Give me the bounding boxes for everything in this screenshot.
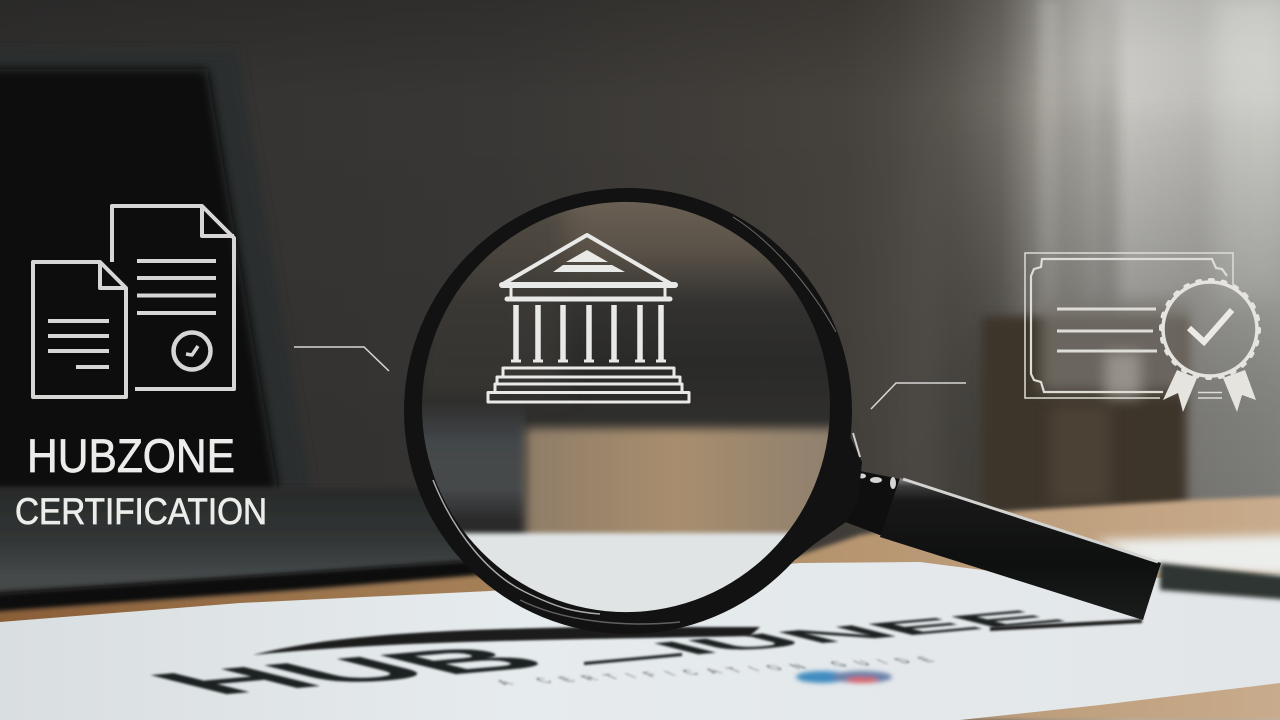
- connector line: right: [871, 383, 966, 409]
- printed document title: HUB: [117, 640, 584, 701]
- magnifier ring: [404, 188, 862, 634]
- printed logo: [796, 671, 892, 683]
- printed document title: [117, 606, 1084, 701]
- printed document title: IUNEE: [633, 606, 1084, 659]
- title: HubZone Certification: [15, 429, 267, 532]
- icon: documents: [33, 206, 234, 397]
- blurred dark object on desk: [981, 300, 1190, 513]
- magnifier handle: [840, 470, 1161, 620]
- main paper sheet: [0, 562, 1280, 720]
- wooden desk: [0, 496, 1280, 720]
- printed document title: A CERTIFICATION GUIDE: [492, 656, 939, 687]
- icon: certificate with seal: [1025, 253, 1259, 412]
- ring shadow on paper: [253, 619, 1142, 655]
- title: HubZone Certification: CERTIFICATION: [15, 491, 267, 532]
- blurred pen: [1160, 563, 1280, 600]
- blurred laptop: [0, 50, 528, 615]
- magnifier lens view: [422, 202, 830, 612]
- connector line: left: [294, 347, 389, 371]
- title: HubZone Certification: HUBZONE: [27, 429, 235, 482]
- blurred white sheet at right: [1095, 535, 1280, 575]
- icon: government building: [488, 235, 689, 402]
